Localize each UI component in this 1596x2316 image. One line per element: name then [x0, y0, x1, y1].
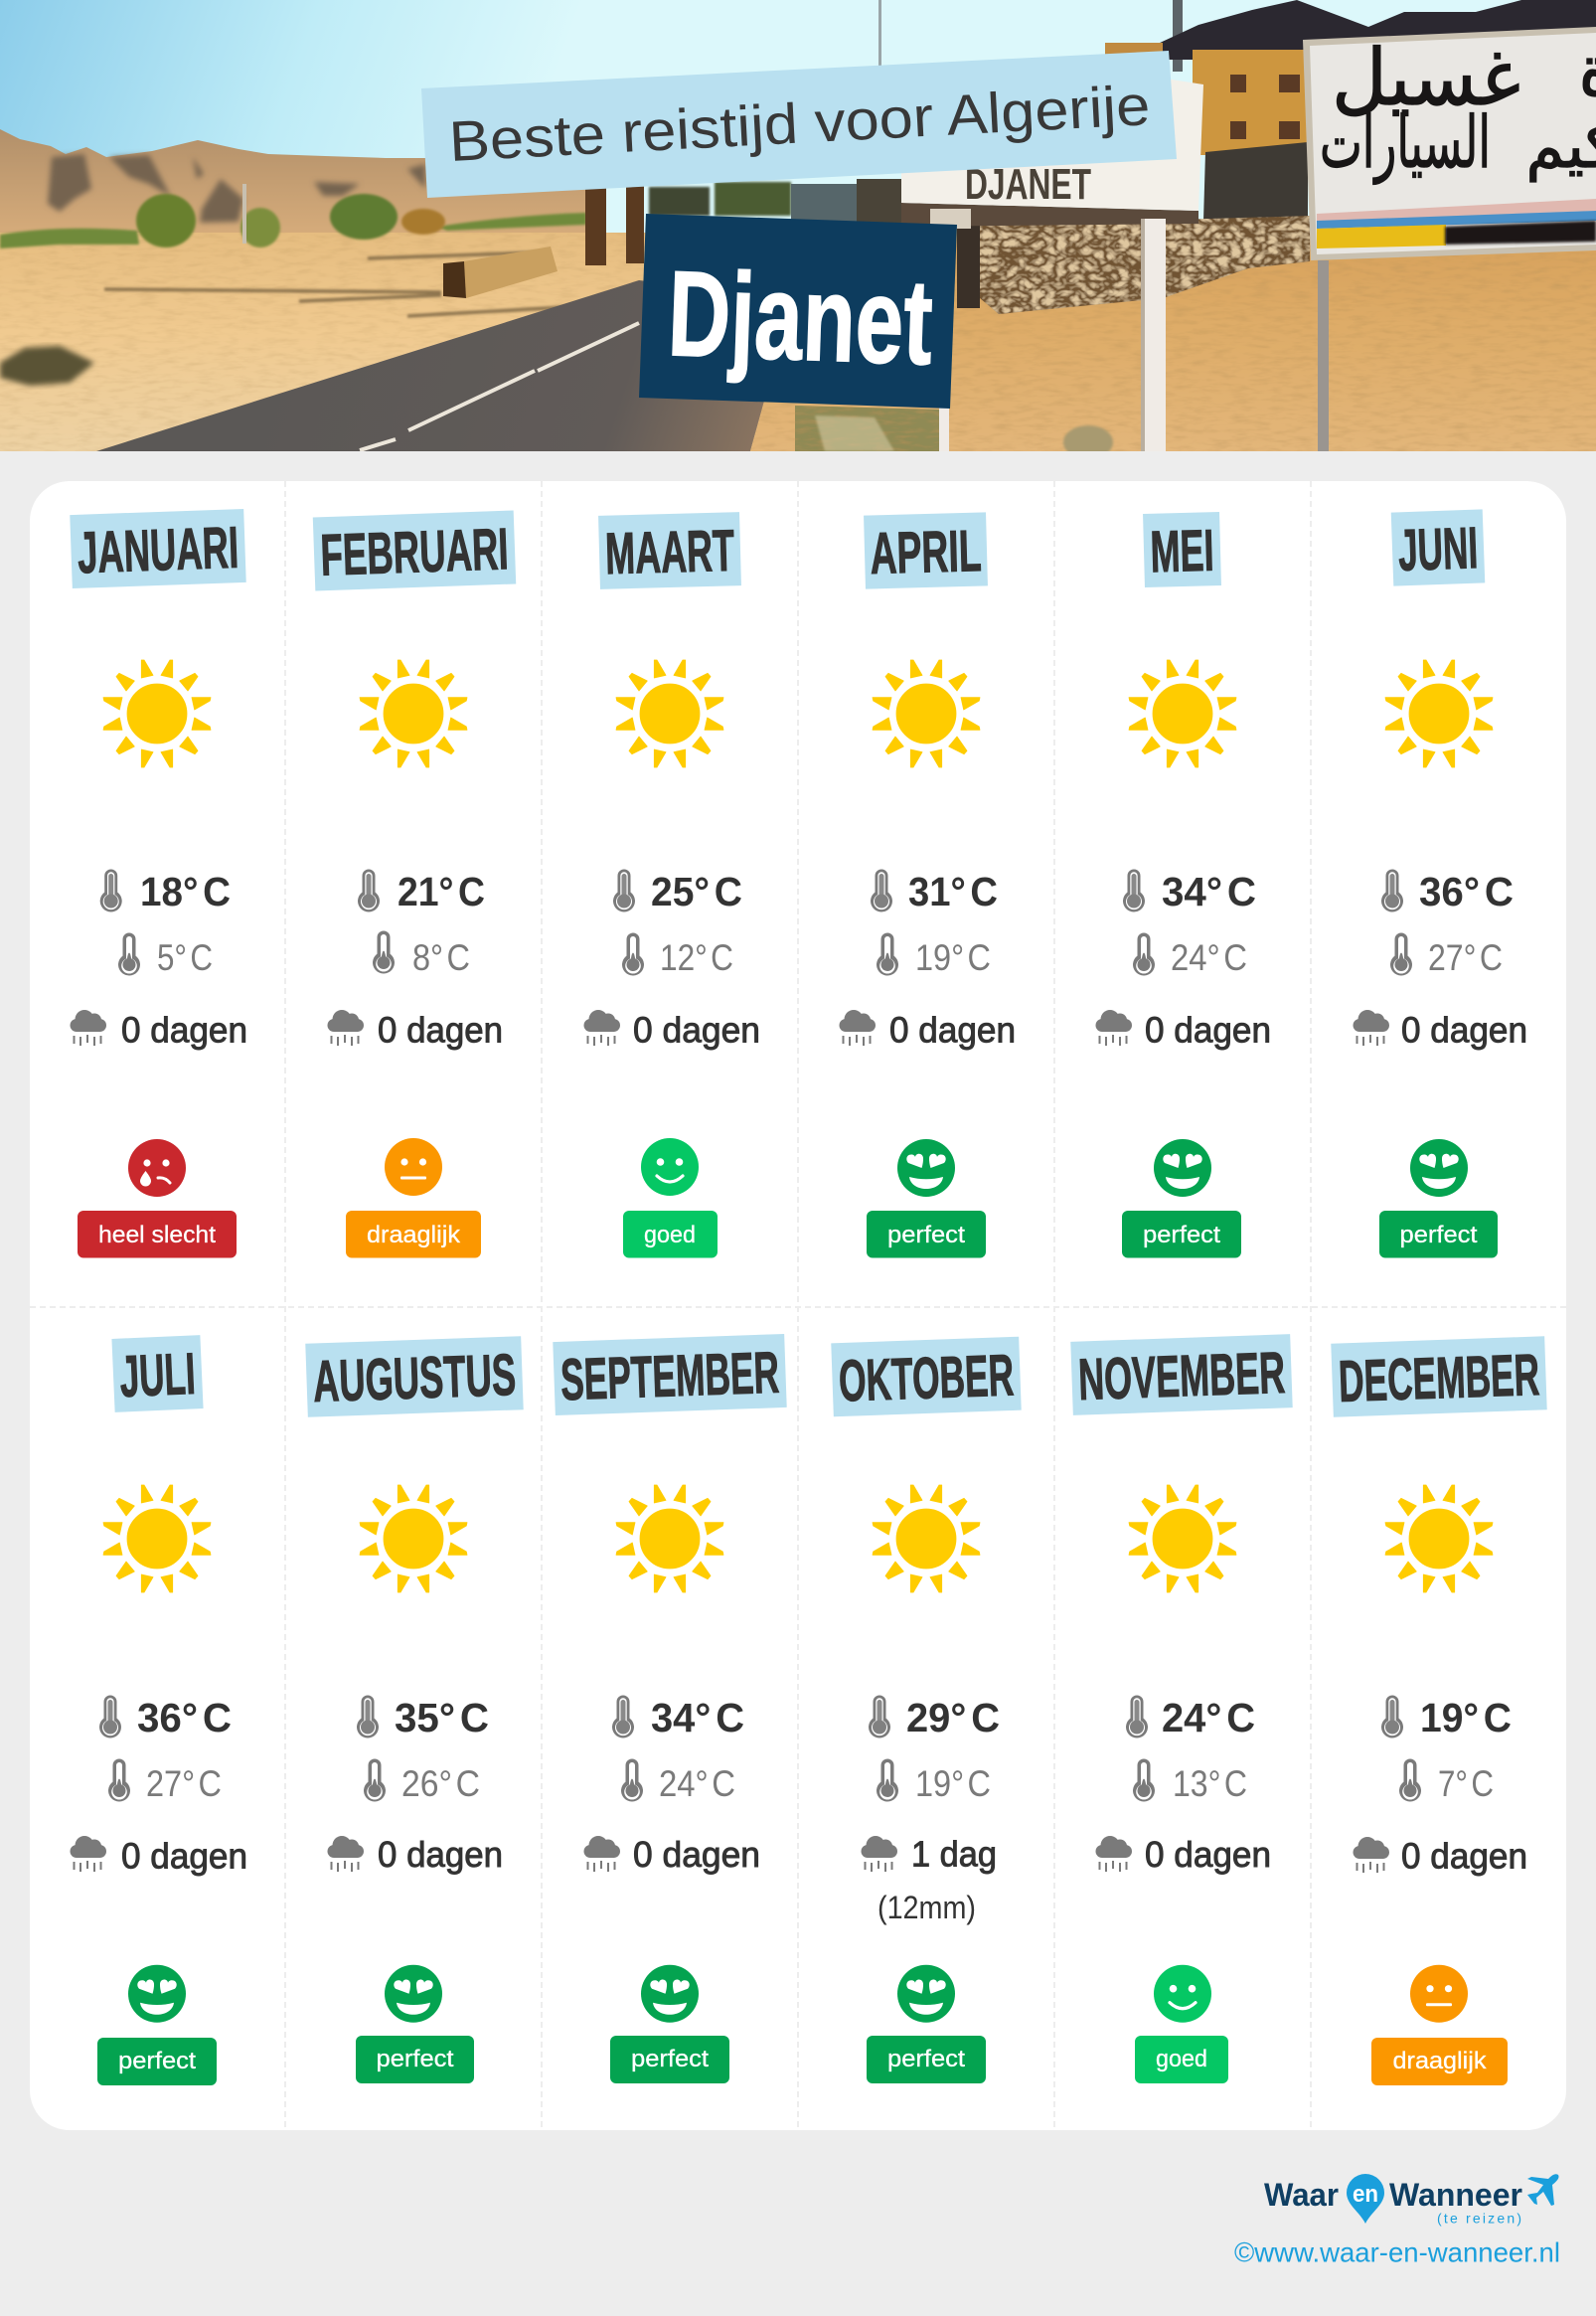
rain days: 0 dagen	[889, 1010, 1016, 1051]
sign lettering: arabic: السيارات	[1320, 100, 1491, 185]
icon: sun	[103, 660, 211, 767]
icon: sun	[873, 660, 980, 767]
sign lettering: DJANET	[965, 160, 1091, 209]
rating badge: perfect	[1399, 1222, 1478, 1248]
rating badge: goed	[644, 1222, 696, 1248]
icon: sun	[873, 1485, 980, 1592]
rating face	[1410, 1965, 1468, 2023]
icon: sun	[616, 660, 723, 767]
high temperature: 29°C	[906, 1695, 1000, 1740]
panel: januari	[70, 509, 247, 1257]
rating face	[128, 1139, 186, 1197]
month heading: AUGUSTUS	[312, 1342, 517, 1414]
panel: maart	[584, 512, 760, 1258]
rain days	[70, 1010, 247, 1051]
rating face	[641, 1965, 699, 2023]
low temperature	[1399, 1759, 1494, 1804]
high temperature: 34°C	[1162, 869, 1256, 914]
high temperature: 31°C	[908, 869, 998, 914]
low temperature: 26°C	[401, 1763, 480, 1804]
rating face	[897, 1965, 955, 2023]
rain amount: (12mm)	[878, 1890, 976, 1925]
rating badge	[623, 1211, 718, 1258]
high temperature	[100, 869, 231, 914]
month heading: MEI	[1150, 518, 1214, 584]
month heading	[1070, 1334, 1293, 1415]
low temperature: 12°C	[660, 937, 733, 978]
icon: sun	[1129, 660, 1236, 767]
panel: juli	[70, 1335, 247, 2085]
rating badge	[1122, 1211, 1241, 1258]
low temperature	[877, 932, 991, 978]
low temperature	[108, 1759, 222, 1804]
low temperature	[1133, 1759, 1247, 1804]
icon: sun	[616, 1485, 723, 1592]
panel: augustus	[305, 1336, 524, 2083]
rating badge: heel slecht	[98, 1222, 216, 1248]
rating badge	[346, 1211, 481, 1258]
low temperature: 27°C	[1428, 937, 1503, 978]
rating face	[897, 1139, 955, 1197]
month heading: APRIL	[870, 518, 982, 586]
rating badge	[97, 2038, 217, 2085]
icon: sun	[360, 1485, 467, 1592]
month heading	[1391, 509, 1485, 586]
rain days: 0 dagen	[1145, 1010, 1271, 1051]
panel: februari	[313, 510, 516, 1258]
high temperature: 36°C	[137, 1695, 232, 1740]
panel: december	[1331, 1336, 1547, 2085]
rating face	[1154, 1965, 1211, 2023]
panel: april	[839, 512, 1016, 1258]
low temperature: 27°C	[146, 1763, 222, 1804]
high temperature: 24°C	[1162, 1695, 1255, 1740]
rain days: 0 dagen	[121, 1835, 247, 1877]
rain days	[70, 1835, 247, 1877]
icon: sun	[1385, 660, 1493, 767]
panel: hero header	[0, 0, 1596, 459]
month heading	[1143, 512, 1221, 587]
rating badge	[356, 2036, 474, 2083]
month heading	[305, 1336, 524, 1417]
rain days: 0 dagen	[1401, 1835, 1527, 1877]
month heading: NOVEMBER	[1077, 1340, 1286, 1412]
low temperature	[1133, 932, 1247, 978]
panel: climate table	[30, 481, 1566, 2130]
rating badge	[1379, 1211, 1498, 1258]
month heading: JULI	[118, 1341, 197, 1409]
panel: mei	[1095, 512, 1271, 1258]
month heading	[111, 1335, 204, 1412]
high temperature: 19°C	[1420, 1695, 1512, 1740]
month heading	[598, 512, 741, 589]
low temperature: 24°C	[659, 1763, 735, 1804]
rating face	[1410, 1139, 1468, 1197]
high temperature	[1381, 1695, 1512, 1740]
rating badge: goed	[1156, 2046, 1207, 2072]
month heading	[70, 509, 246, 588]
rain days: 0 dagen	[633, 1010, 760, 1051]
month heading: SEPTEMBER	[559, 1340, 780, 1412]
rating badge	[867, 2036, 986, 2083]
month heading: FEBRUARI	[319, 516, 510, 588]
low temperature: 5°C	[157, 937, 213, 978]
rating face	[641, 1138, 699, 1196]
month heading: MAART	[604, 518, 735, 586]
rain days: 0 dagen	[378, 1834, 503, 1875]
rating face	[385, 1965, 442, 2023]
high temperature: 36°C	[1419, 869, 1514, 914]
destination heading: Djanet	[666, 246, 935, 390]
logo: Waar en Wanneer: en	[1353, 2181, 1378, 2208]
rating face	[1154, 1139, 1211, 1197]
high temperature: 18°C	[140, 869, 231, 914]
rating badge	[1135, 2036, 1228, 2083]
rain days: 0 dagen	[1401, 1010, 1527, 1051]
icon: sun	[103, 1485, 211, 1592]
month heading: JUNI	[1397, 515, 1479, 583]
low temperature: 19°C	[915, 937, 991, 978]
month heading: OKTOBER	[838, 1342, 1015, 1414]
low temperature: 7°C	[1438, 1763, 1494, 1804]
rain days: 1 dag	[911, 1833, 997, 1875]
month heading	[313, 510, 516, 591]
panel: november	[1070, 1334, 1293, 2083]
rating badge: perfect	[118, 2048, 196, 2074]
low temperature	[364, 1759, 480, 1804]
month heading	[831, 1337, 1022, 1416]
card background	[30, 481, 1566, 2130]
rating badge	[867, 1211, 986, 1258]
logo: Waar en Wanneer: Wanneer	[1389, 2177, 1522, 2213]
logo: Waar en Wanneer	[1264, 2174, 1559, 2227]
month heading	[864, 512, 988, 589]
high temperature	[871, 869, 998, 914]
rating badge	[78, 1211, 237, 1258]
title strip	[421, 51, 1177, 198]
rating badge: draaglijk	[367, 1222, 461, 1248]
high temperature: 21°C	[398, 869, 485, 914]
low temperature	[877, 1759, 991, 1804]
rating badge: perfect	[631, 2046, 709, 2072]
high temperature: 25°C	[651, 869, 742, 914]
low temperature: 13°C	[1173, 1763, 1247, 1804]
icon: map pin	[1347, 2174, 1384, 2224]
logo: Waar en Wanneer: Waar	[1264, 2177, 1339, 2213]
high temperature: 34°C	[651, 1695, 744, 1740]
low temperature: 8°C	[412, 937, 470, 978]
rain days	[861, 1833, 997, 1875]
destination heading	[639, 214, 957, 409]
sign lettering: arabic	[1320, 30, 1596, 185]
rain days: 0 dagen	[378, 1010, 503, 1051]
photo: road into Djanet	[0, 0, 1596, 459]
sign lettering: arabic: غسيل	[1332, 34, 1520, 123]
rain days	[328, 1010, 503, 1051]
website url: ©www.waar-en-wanneer.nl	[1234, 2237, 1560, 2268]
rain days: 0 dagen	[633, 1834, 760, 1875]
rain days: 0 dagen	[1145, 1834, 1271, 1875]
high temperature	[358, 869, 485, 914]
icon: sun	[1385, 1485, 1493, 1592]
rating badge	[610, 2036, 729, 2083]
panel: september	[553, 1334, 787, 2083]
low temperature	[1390, 932, 1503, 978]
rating face	[128, 1965, 186, 2023]
rain days: 0 dagen	[121, 1010, 247, 1051]
rating badge	[1371, 2038, 1508, 2085]
icon: sun	[360, 660, 467, 767]
month heading	[553, 1334, 787, 1415]
low temperature	[118, 932, 213, 978]
low temperature: 24°C	[1171, 937, 1247, 978]
rating badge: draaglijk	[1393, 2048, 1488, 2074]
month heading: JANUARI	[77, 515, 239, 585]
low temperature	[621, 1759, 735, 1804]
rating badge: perfect	[1143, 1222, 1220, 1248]
rating badge: perfect	[887, 1222, 965, 1248]
rating badge: perfect	[887, 2046, 965, 2072]
icon: sun	[1129, 1485, 1236, 1592]
rating face	[385, 1138, 442, 1196]
icon: airplane	[1527, 2174, 1559, 2206]
rating badge: perfect	[376, 2046, 454, 2072]
panel: juni	[1354, 509, 1527, 1258]
low temperature	[622, 932, 733, 978]
high temperature: 35°C	[395, 1695, 489, 1740]
title strip: Beste reistijd voor Algerije	[447, 74, 1152, 174]
low temperature	[373, 930, 470, 978]
low temperature: 19°C	[915, 1763, 991, 1804]
rain days	[328, 1834, 503, 1875]
panel: oktober	[831, 1337, 1022, 2083]
logo: Waar en Wanneer: (te reizen)	[1437, 2211, 1521, 2227]
